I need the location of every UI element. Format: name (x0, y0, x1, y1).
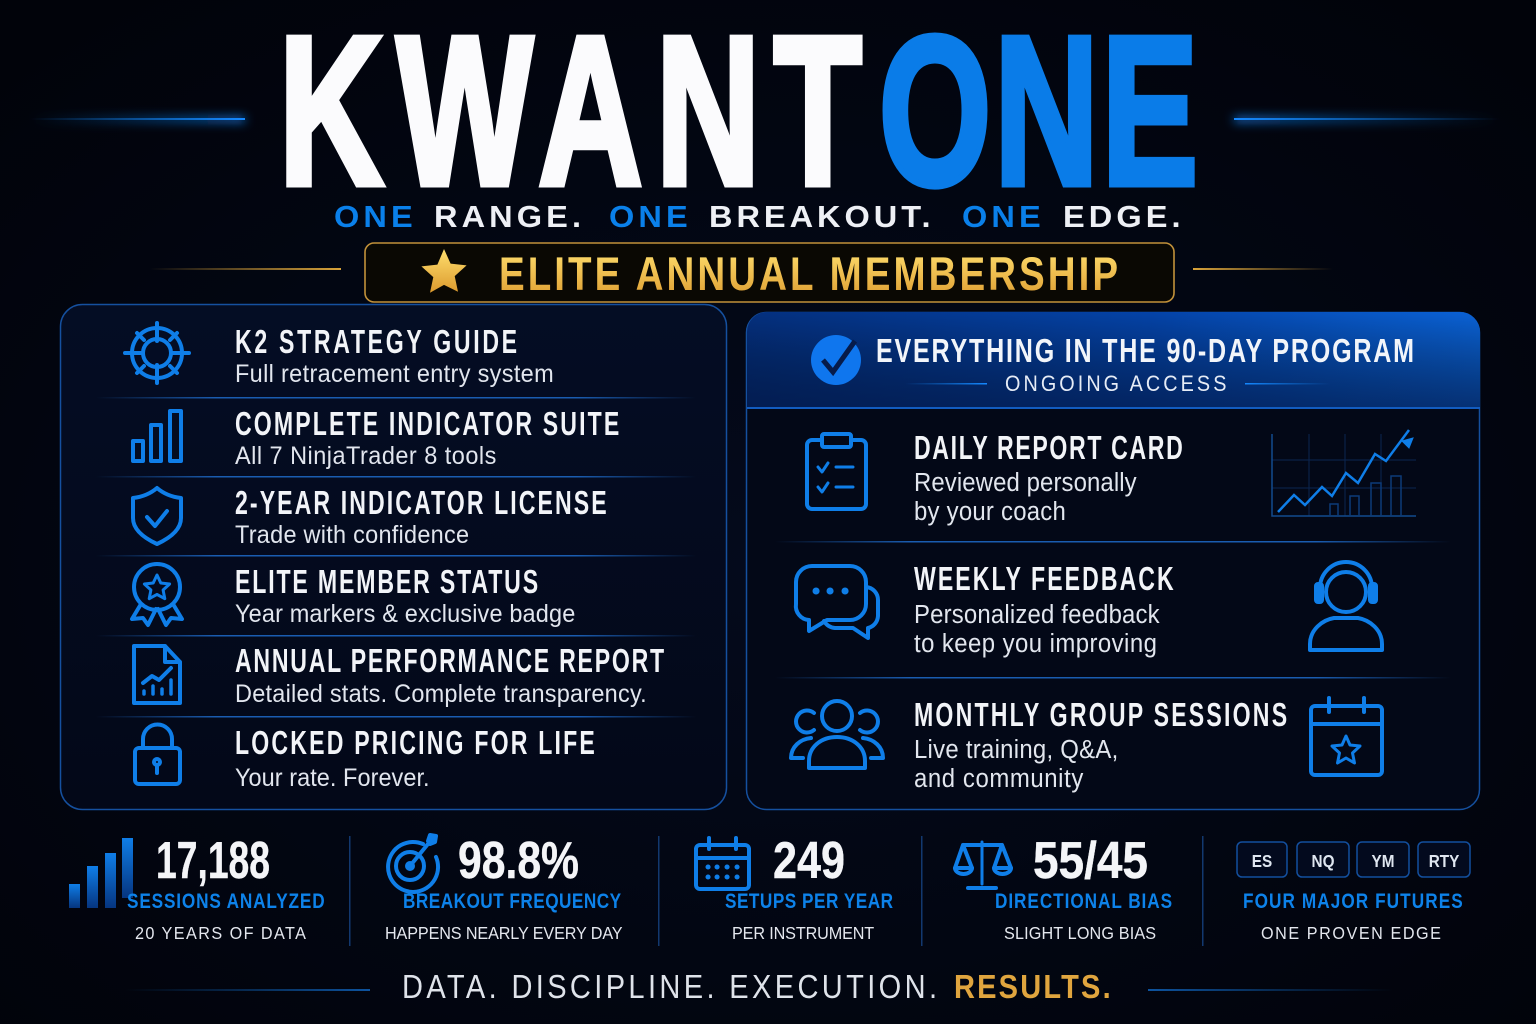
icon: padlock (135, 724, 180, 784)
program item: weekly feedback (796, 561, 1382, 658)
stat: sessions analyzed: 20 YEARS OF DATA (135, 923, 307, 943)
program item: daily report card: Reviewed personally (914, 468, 1137, 497)
chip: RTY: RTY (1429, 851, 1459, 871)
program item: weekly feedback: WEEKLY FEEDBACK (914, 561, 1174, 598)
panel header: ONGOING ACCESS (1005, 372, 1226, 396)
chip: NQ: NQ (1312, 851, 1334, 871)
benefit: K2 strategy guide (125, 323, 554, 388)
program item: daily report card: by your coach (914, 497, 1066, 526)
title (279, 0, 1198, 230)
icon: headset coach (1310, 562, 1382, 650)
icon: report document (134, 646, 180, 703)
benefit: locked pricing: Your rate. Forever. (235, 764, 430, 792)
tagline: ONE (962, 199, 1041, 234)
benefit: 2-year indicator license (133, 485, 607, 549)
panel: 90-day program (746, 312, 1481, 810)
benefit: annual performance report: Detailed stats. Complete transparency. (235, 680, 647, 708)
tagline (334, 199, 1181, 234)
membership banner (365, 243, 1174, 302)
program item: daily report card: DAILY REPORT CARD (914, 430, 1183, 467)
benefit: elite member status: ELITE MEMBER STATUS (235, 564, 538, 601)
benefit: annual performance report: ANNUAL PERFORMANCE REPORT (235, 643, 665, 680)
panel: membership benefits (60, 304, 726, 810)
stat: directional bias: DIRECTIONAL BIAS (995, 891, 1172, 913)
icon: award ribbon (132, 564, 182, 625)
benefit: K2 strategy guide: K2 STRATEGY GUIDE (235, 324, 517, 361)
chart: growth line (1272, 430, 1416, 516)
stat: setups per year: PER INSTRUMENT (732, 923, 875, 943)
stat: breakout frequency: 98.8% (458, 832, 579, 890)
stat: sessions analyzed (69, 832, 325, 943)
icon: chat bubbles (796, 566, 878, 638)
icon: check badge (811, 335, 861, 385)
icon: balance scale (955, 842, 1011, 888)
footer slogan (125, 968, 1393, 1005)
benefit: complete indicator suite: COMPLETE INDICATOR SUITE (235, 406, 619, 443)
tagline: ONE (334, 199, 413, 234)
stat: four major futures (1237, 842, 1470, 943)
chip: YM: YM (1372, 851, 1394, 871)
stat: breakout frequency: HAPPENS NEARLY EVERY DAY (385, 923, 623, 943)
stat: breakout frequency: BREAKOUT FREQUENCY (403, 891, 621, 913)
icon: calendar with star (1311, 698, 1382, 775)
icon: shield (133, 488, 181, 544)
title: ONE (879, 0, 1198, 230)
footer slogan: RESULTS. (954, 968, 1111, 1005)
icon: clipboard (807, 434, 866, 509)
benefit: locked pricing (135, 724, 595, 792)
program item: monthly group sessions: and community (914, 764, 1084, 793)
banner text: ELITE ANNUAL MEMBERSHIP (499, 248, 1118, 301)
benefit: complete indicator suite (133, 406, 619, 470)
benefit: 2-year indicator license: 2-YEAR INDICATOR LICENSE (235, 485, 607, 522)
chip: ES (1237, 842, 1287, 877)
icon: gold star (421, 249, 467, 293)
chip: NQ (1297, 842, 1349, 877)
program item: daily report card (807, 430, 1416, 526)
stat: setups per year (696, 832, 893, 943)
panel header: EVERYTHING IN THE 90-DAY PROGRAM (876, 333, 1414, 370)
icon: bar chart (133, 411, 181, 461)
icon: target with arrow (388, 835, 438, 892)
stat: breakout frequency (385, 832, 623, 943)
stat: setups per year: 249 (773, 832, 845, 890)
icon: group of people (791, 701, 883, 768)
chip: RTY (1418, 842, 1470, 877)
tagline: EDGE. (1063, 199, 1181, 234)
benefit: complete indicator suite: All 7 NinjaTrader 8 tools (235, 442, 496, 470)
icon: crosshair (125, 323, 189, 383)
stat: directional bias: 55/45 (1033, 832, 1148, 890)
stat: sessions analyzed: SESSIONS ANALYZED (127, 891, 325, 913)
icon: calendar (696, 838, 749, 889)
stat: directional bias (955, 832, 1172, 943)
chip: ES: ES (1252, 851, 1272, 871)
tagline: RANGE. (434, 199, 581, 234)
stat: setups per year: SETUPS PER YEAR (725, 891, 893, 913)
benefit: annual performance report (134, 643, 665, 708)
footer slogan: DATA. DISCIPLINE. EXECUTION. (402, 968, 937, 1005)
stat: four major futures: FOUR MAJOR FUTURES (1243, 891, 1463, 913)
program item: monthly group sessions: MONTHLY GROUP SESSIONS (914, 697, 1287, 734)
benefit: locked pricing: LOCKED PRICING FOR LIFE (235, 725, 595, 762)
panel header (746, 312, 1481, 409)
benefit: elite member status (132, 564, 575, 628)
benefit: K2 strategy guide: Full retracement entry system (235, 360, 554, 388)
tagline: ONE (609, 199, 688, 234)
title: KWANT (279, 0, 862, 230)
right title glow line (1234, 117, 1500, 122)
left title glow line (30, 117, 245, 122)
program item: weekly feedback: Personalized feedback (914, 600, 1160, 629)
program item: monthly group sessions (791, 697, 1382, 793)
chip: YM (1357, 842, 1409, 877)
stat: directional bias: SLIGHT LONG BIAS (1004, 923, 1156, 943)
stat: sessions analyzed: 17,188 (156, 832, 270, 890)
tagline: BREAKOUT. (709, 199, 931, 234)
benefit: elite member status: Year markers & exclusive badge (235, 600, 575, 628)
benefit: 2-year indicator license: Trade with confidence (235, 521, 469, 549)
stat: four major futures: ONE PROVEN EDGE (1261, 923, 1441, 943)
icon: rising bars (69, 838, 133, 908)
program item: monthly group sessions: Live training, Q&A, (914, 735, 1118, 764)
program item: weekly feedback: to keep you improving (914, 629, 1157, 658)
